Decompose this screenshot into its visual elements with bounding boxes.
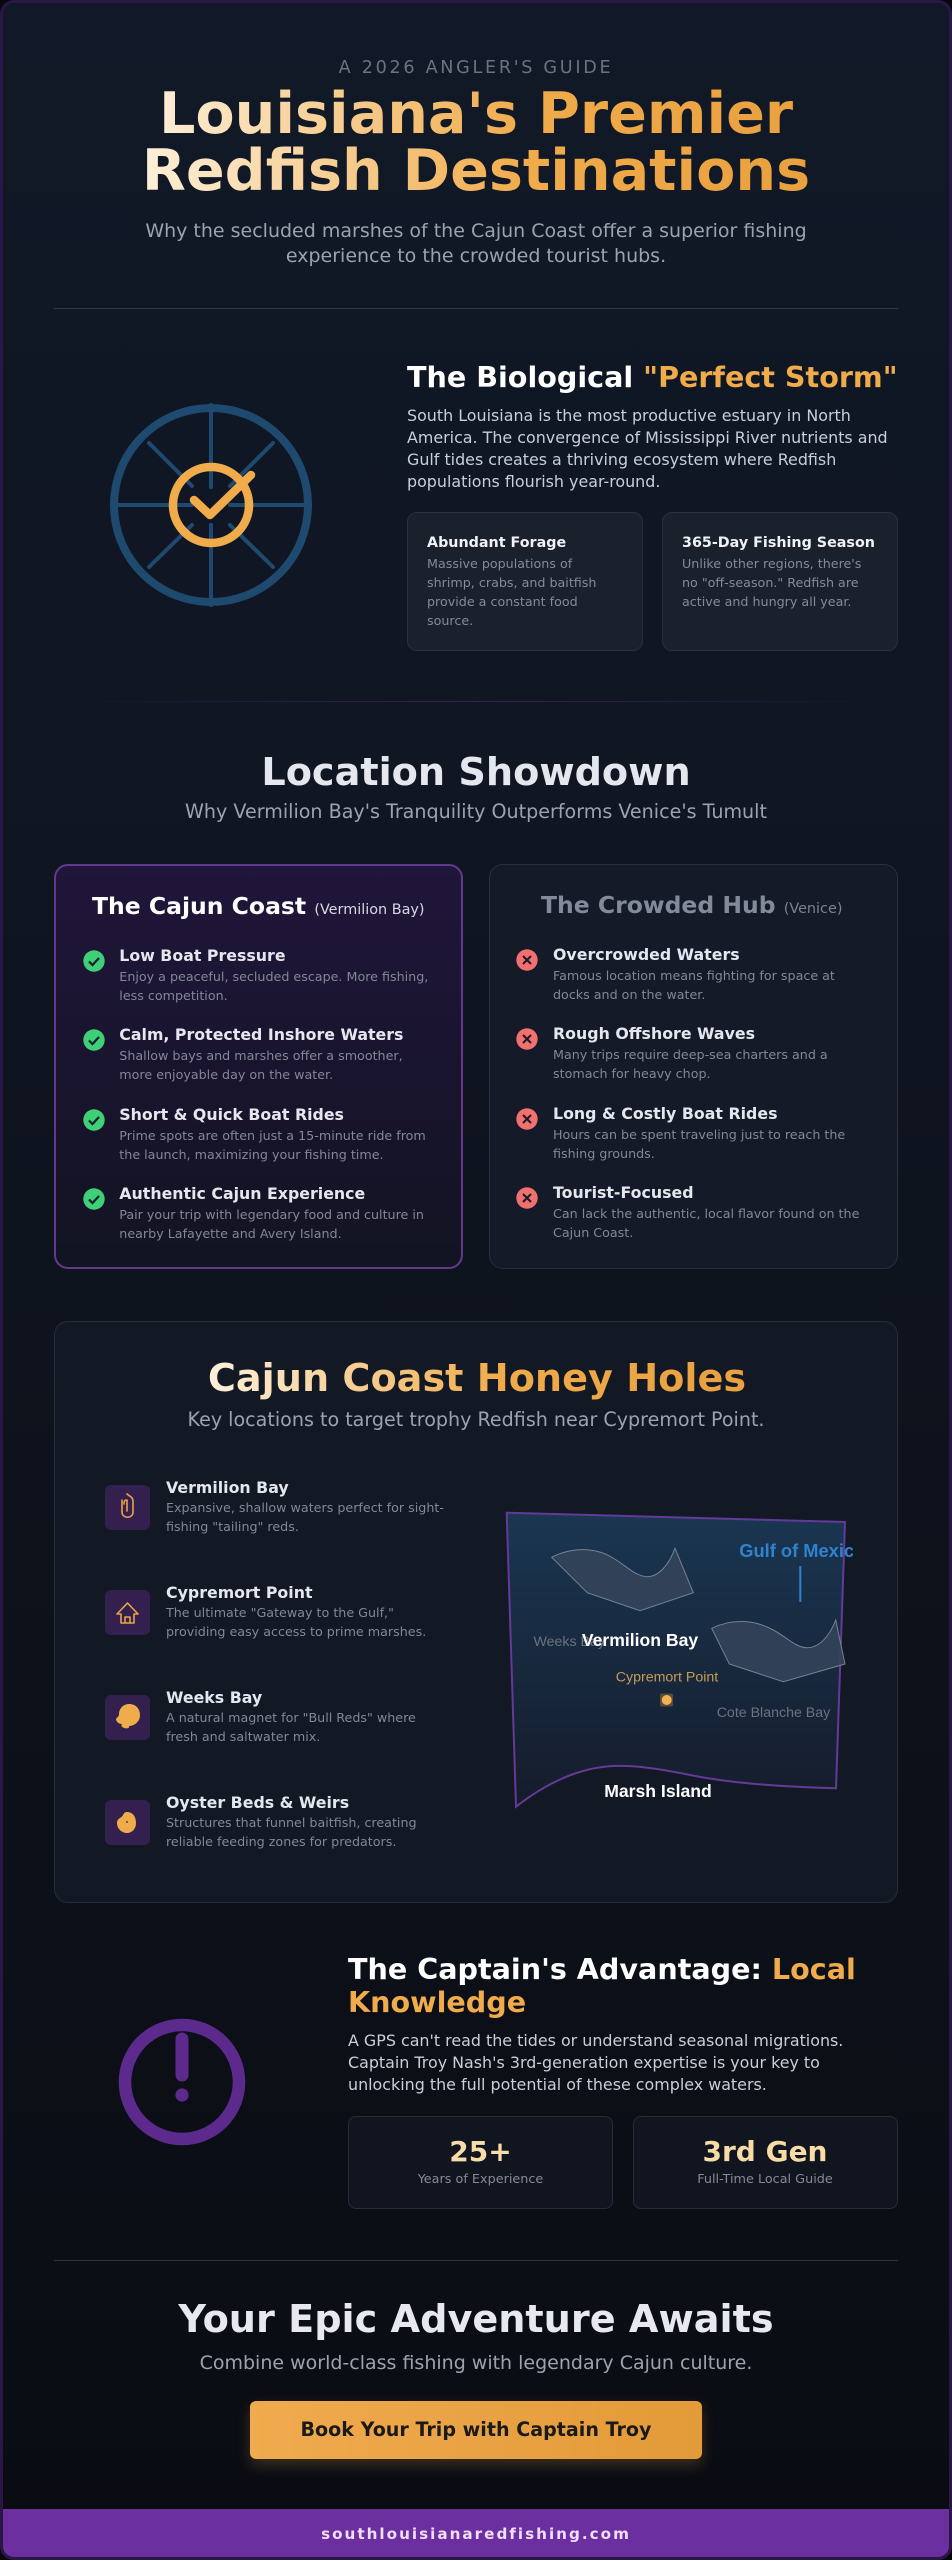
panel heading: The Cajun Coast (Vermilion Bay): [92, 892, 425, 920]
card text: [427, 556, 596, 628]
location text: The ultimate "Gateway to the Gulf,": [166, 1605, 394, 1620]
subtitle: [145, 220, 807, 267]
item text: the launch, maximizing your fishing time.: [119, 1147, 384, 1162]
icon: oyster: [105, 1800, 150, 1845]
icon: cross: [516, 949, 538, 971]
panel: the cajun coast: [54, 864, 463, 1269]
map marker: cypremort point: [660, 1694, 673, 1706]
location text: [166, 1813, 417, 1851]
paragraph: unlocking the full potential of these complex waters.: [348, 2075, 767, 2094]
item title: Low Boat Pressure: [119, 946, 286, 965]
location text: Structures that funnel baitfish, creating: [166, 1815, 417, 1830]
icon: check: [83, 1109, 105, 1131]
stat label: Full-Time Local Guide: [697, 2172, 833, 2187]
item text: Many trips require deep-sea charters and a: [553, 1047, 828, 1062]
location text: [166, 1605, 426, 1639]
map marker line: [799, 1566, 801, 1602]
title: Louisiana's Premier: [159, 81, 793, 147]
subheading: Why Vermilion Bay's Tranquility Outperforms Venice's Tumult: [185, 800, 767, 823]
heading: The Biological "Perfect Storm": [407, 360, 898, 394]
stat number: 3rd Gen: [702, 2135, 828, 2168]
map label: vermilion bay: Vermilion Bay: [582, 1630, 698, 1650]
item text: [119, 1207, 424, 1241]
item text: [119, 969, 428, 1003]
card text: source.: [427, 613, 473, 628]
map label: weeks bay: Weeks Bay: [534, 1634, 606, 1650]
section: captain's advantage: [54, 1948, 898, 2218]
subtitle: experience to the crowded tourist hubs.: [286, 245, 666, 267]
location title: Cypremort Point: [166, 1583, 312, 1602]
icon: blob: [105, 1695, 150, 1740]
card: 365-day season: [662, 512, 898, 651]
card title: 365-Day Fishing Season: [682, 535, 875, 551]
card text: no "off-season." Redfish are: [682, 575, 859, 590]
item text: more enjoyable day on the water.: [119, 1067, 333, 1082]
map label: cote blanche bay: Cote Blanche Bay: [717, 1705, 831, 1721]
card text: provide a constant food: [427, 594, 578, 609]
section: biological perfect storm: [110, 360, 898, 651]
item: quick rides: [83, 1105, 426, 1162]
icon: cross: [516, 1187, 538, 1209]
paragraph: South Louisiana is the most productive estuary in North: [407, 406, 851, 425]
item: long rides: [516, 1104, 845, 1161]
panel: the crowded hub: [489, 864, 898, 1269]
map label: gulf of mexico: Gulf of Mexico: [739, 1540, 865, 1561]
item text: Famous location means fighting for space at: [553, 968, 835, 983]
location text: [166, 1500, 444, 1534]
item text: Hours can be spent traveling just to reach the: [553, 1127, 845, 1142]
location title: Weeks Bay: [166, 1688, 262, 1707]
location: vermilion bay: [105, 1478, 444, 1534]
map label: cypremort point: Cypremort Point: [616, 1670, 718, 1686]
item text: nearby Lafayette and Avery Island.: [119, 1226, 342, 1241]
item text: docks and on the water.: [553, 987, 705, 1002]
paragraph: A GPS can't read the tides or understand seasonal migrations.: [348, 2031, 843, 2050]
item text: Can lack the authentic, local flavor found on the: [553, 1206, 859, 1221]
location title: Vermilion Bay: [166, 1478, 289, 1497]
location text: [166, 1710, 416, 1744]
stat number: 25+: [449, 2135, 512, 2168]
location text: fresh and saltwater mix.: [166, 1729, 320, 1744]
card title: Abundant Forage: [427, 535, 566, 551]
location: cypremort point: [105, 1583, 426, 1639]
heading: [348, 1953, 856, 2018]
item title: Calm, Protected Inshore Waters: [119, 1025, 403, 1044]
map: marsh outline: [507, 1513, 845, 1807]
item text: stomach for heavy chop.: [553, 1066, 711, 1081]
card text: shrimp, crabs, and baitfish: [427, 575, 596, 590]
stat: generation: [632, 2116, 898, 2209]
cta subheading: Combine world-class fishing with legendary Cajun culture.: [200, 2352, 752, 2374]
item: rough waves: [516, 1024, 828, 1081]
item: tourist: [516, 1183, 859, 1240]
item title: Overcrowded Waters: [553, 945, 740, 964]
heading: The Captain's Advantage: Local: [348, 1952, 856, 1986]
stat: years of experience: [348, 2116, 613, 2209]
item text: Pair your trip with legendary food and culture in: [119, 1207, 424, 1222]
item: authentic: [83, 1184, 424, 1241]
card text: [682, 556, 861, 609]
item text: Enjoy a peaceful, secluded escape. More fishing,: [119, 969, 428, 984]
item text: fishing grounds.: [553, 1146, 655, 1161]
icon: house: [105, 1590, 150, 1635]
cta button: [250, 2401, 702, 2459]
card text: active and hungry all year.: [682, 594, 851, 609]
subheading: Key locations to target trophy Redfish near Cypremort Point.: [188, 1408, 764, 1431]
item text: [553, 1127, 845, 1161]
divider: [54, 308, 898, 309]
card text: Unlike other regions, there's: [682, 556, 861, 571]
icon: check: [83, 1029, 105, 1051]
item text: Shallow bays and marshes offer a smoother,: [119, 1048, 403, 1063]
paragraph: Captain Troy Nash's 3rd-generation expertise is your key to: [348, 2053, 820, 2072]
item text: less competition.: [119, 988, 228, 1003]
item text: [119, 1048, 403, 1082]
panel heading: The Crowded Hub (Venice): [541, 891, 842, 919]
item title: Tourist-Focused: [553, 1183, 694, 1202]
item text: [553, 1047, 828, 1081]
location text: fishing "tailing" reds.: [166, 1519, 299, 1534]
card text: Massive populations of: [427, 556, 572, 571]
paragraph: [407, 406, 888, 491]
heading: Cajun Coast Honey Holes: [208, 1357, 746, 1401]
location title: Oyster Beds & Weirs: [166, 1793, 349, 1812]
item text: Prime spots are often just a 15-minute ride from: [119, 1128, 426, 1143]
item text: [119, 1128, 426, 1162]
title: Redfish Destinations: [142, 138, 810, 204]
item title: Rough Offshore Waves: [553, 1024, 755, 1043]
location: weeks bay: [105, 1688, 416, 1744]
map: land shape east: [712, 1620, 845, 1682]
paragraph: Gulf tides creates a thriving ecosystem where Redfish: [407, 450, 836, 469]
footer: [3, 2509, 949, 2557]
location text: A natural magnet for "Bull Reds" where: [166, 1710, 416, 1725]
item: calm waters: [83, 1025, 403, 1082]
title: [136, 86, 816, 200]
item: low boat pressure: [83, 946, 428, 1003]
eyebrow: A 2026 ANGLER'S GUIDE: [339, 58, 613, 78]
location text: reliable feeding zones for predators.: [166, 1834, 396, 1849]
card: abundant forage: [407, 512, 643, 651]
panel: honey holes: [54, 1321, 898, 1903]
icon: shell: [105, 1485, 150, 1530]
paragraph: populations flourish year-round.: [407, 472, 660, 491]
location: oyster beds: [105, 1793, 417, 1849]
item text: [553, 968, 835, 1002]
subtitle: Why the secluded marshes of the Cajun Coast offer a superior fishing: [145, 220, 807, 242]
item: overcrowded: [516, 945, 835, 1002]
cta heading: Your Epic Adventure Awaits: [178, 2298, 774, 2342]
map: [506, 1512, 853, 1809]
icon: check: [83, 950, 105, 972]
icon: alert circle: [117, 2017, 247, 2147]
paragraph: America. The convergence of Mississippi River nutrients and: [407, 428, 888, 447]
heading: Knowledge: [348, 1984, 526, 2018]
location text: providing easy access to prime marshes.: [166, 1624, 426, 1639]
icon: compass with check: [110, 403, 312, 607]
location text: Expansive, shallow waters perfect for sight-: [166, 1500, 444, 1515]
paragraph: [348, 2030, 843, 2096]
map: land shape north: [552, 1548, 693, 1611]
heading: location showdown: Location Showdown: [261, 751, 691, 795]
item title: Authentic Cajun Experience: [119, 1184, 365, 1203]
cta button: Book Your Trip with Captain Troy: [300, 2418, 652, 2441]
stat label: Years of Experience: [418, 2172, 543, 2187]
item title: Short & Quick Boat Rides: [119, 1105, 344, 1124]
icon: cross: [516, 1028, 538, 1050]
map label: marsh island: Marsh Island: [604, 1781, 712, 1801]
icon: check: [83, 1188, 105, 1210]
item text: [553, 1206, 859, 1240]
item text: Cajun Coast.: [553, 1225, 633, 1240]
footer: southlouisianaredfishing.com: [321, 2525, 631, 2543]
item title: Long & Costly Boat Rides: [553, 1104, 777, 1123]
icon: cross: [516, 1108, 538, 1130]
